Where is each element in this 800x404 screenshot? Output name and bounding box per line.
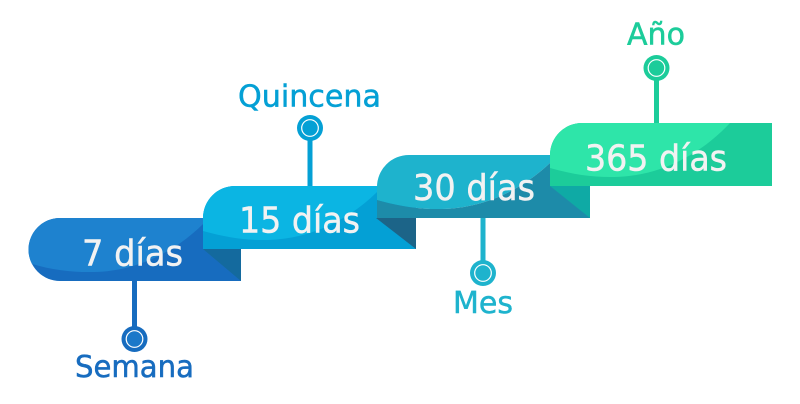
- step 3: Mes: [377, 155, 590, 321]
- ribbon: 7 días: [28, 218, 241, 281]
- connector: Año: [644, 55, 670, 126]
- connector: Mes: [470, 215, 496, 286]
- step 1: Semana: [28, 218, 241, 385]
- step 2: Quincena: [203, 80, 416, 249]
- ribbon: 15 días: [203, 186, 416, 249]
- connector: Quincena: [297, 115, 323, 189]
- ribbon: 365 días: [550, 123, 772, 186]
- label: Mes: Mes: [453, 286, 513, 321]
- ribbon: 30 días: [377, 155, 590, 218]
- label: Quincena: Quincena: [238, 80, 381, 114]
- step 4: Año: [550, 18, 772, 186]
- connector: Semana: [122, 278, 148, 352]
- value: 15 días: 15 días: [239, 200, 360, 242]
- fold: ribbon 1: [203, 249, 241, 281]
- value: 7 días: 7 días: [82, 234, 183, 274]
- value: 365 días: 365 días: [585, 138, 727, 180]
- fold: ribbon 3: [550, 186, 590, 218]
- value: 30 días: 30 días: [413, 168, 535, 209]
- fold: ribbon 2: [376, 218, 416, 249]
- label: Semana: Semana: [75, 350, 194, 385]
- label: Año: Año: [627, 18, 685, 52]
